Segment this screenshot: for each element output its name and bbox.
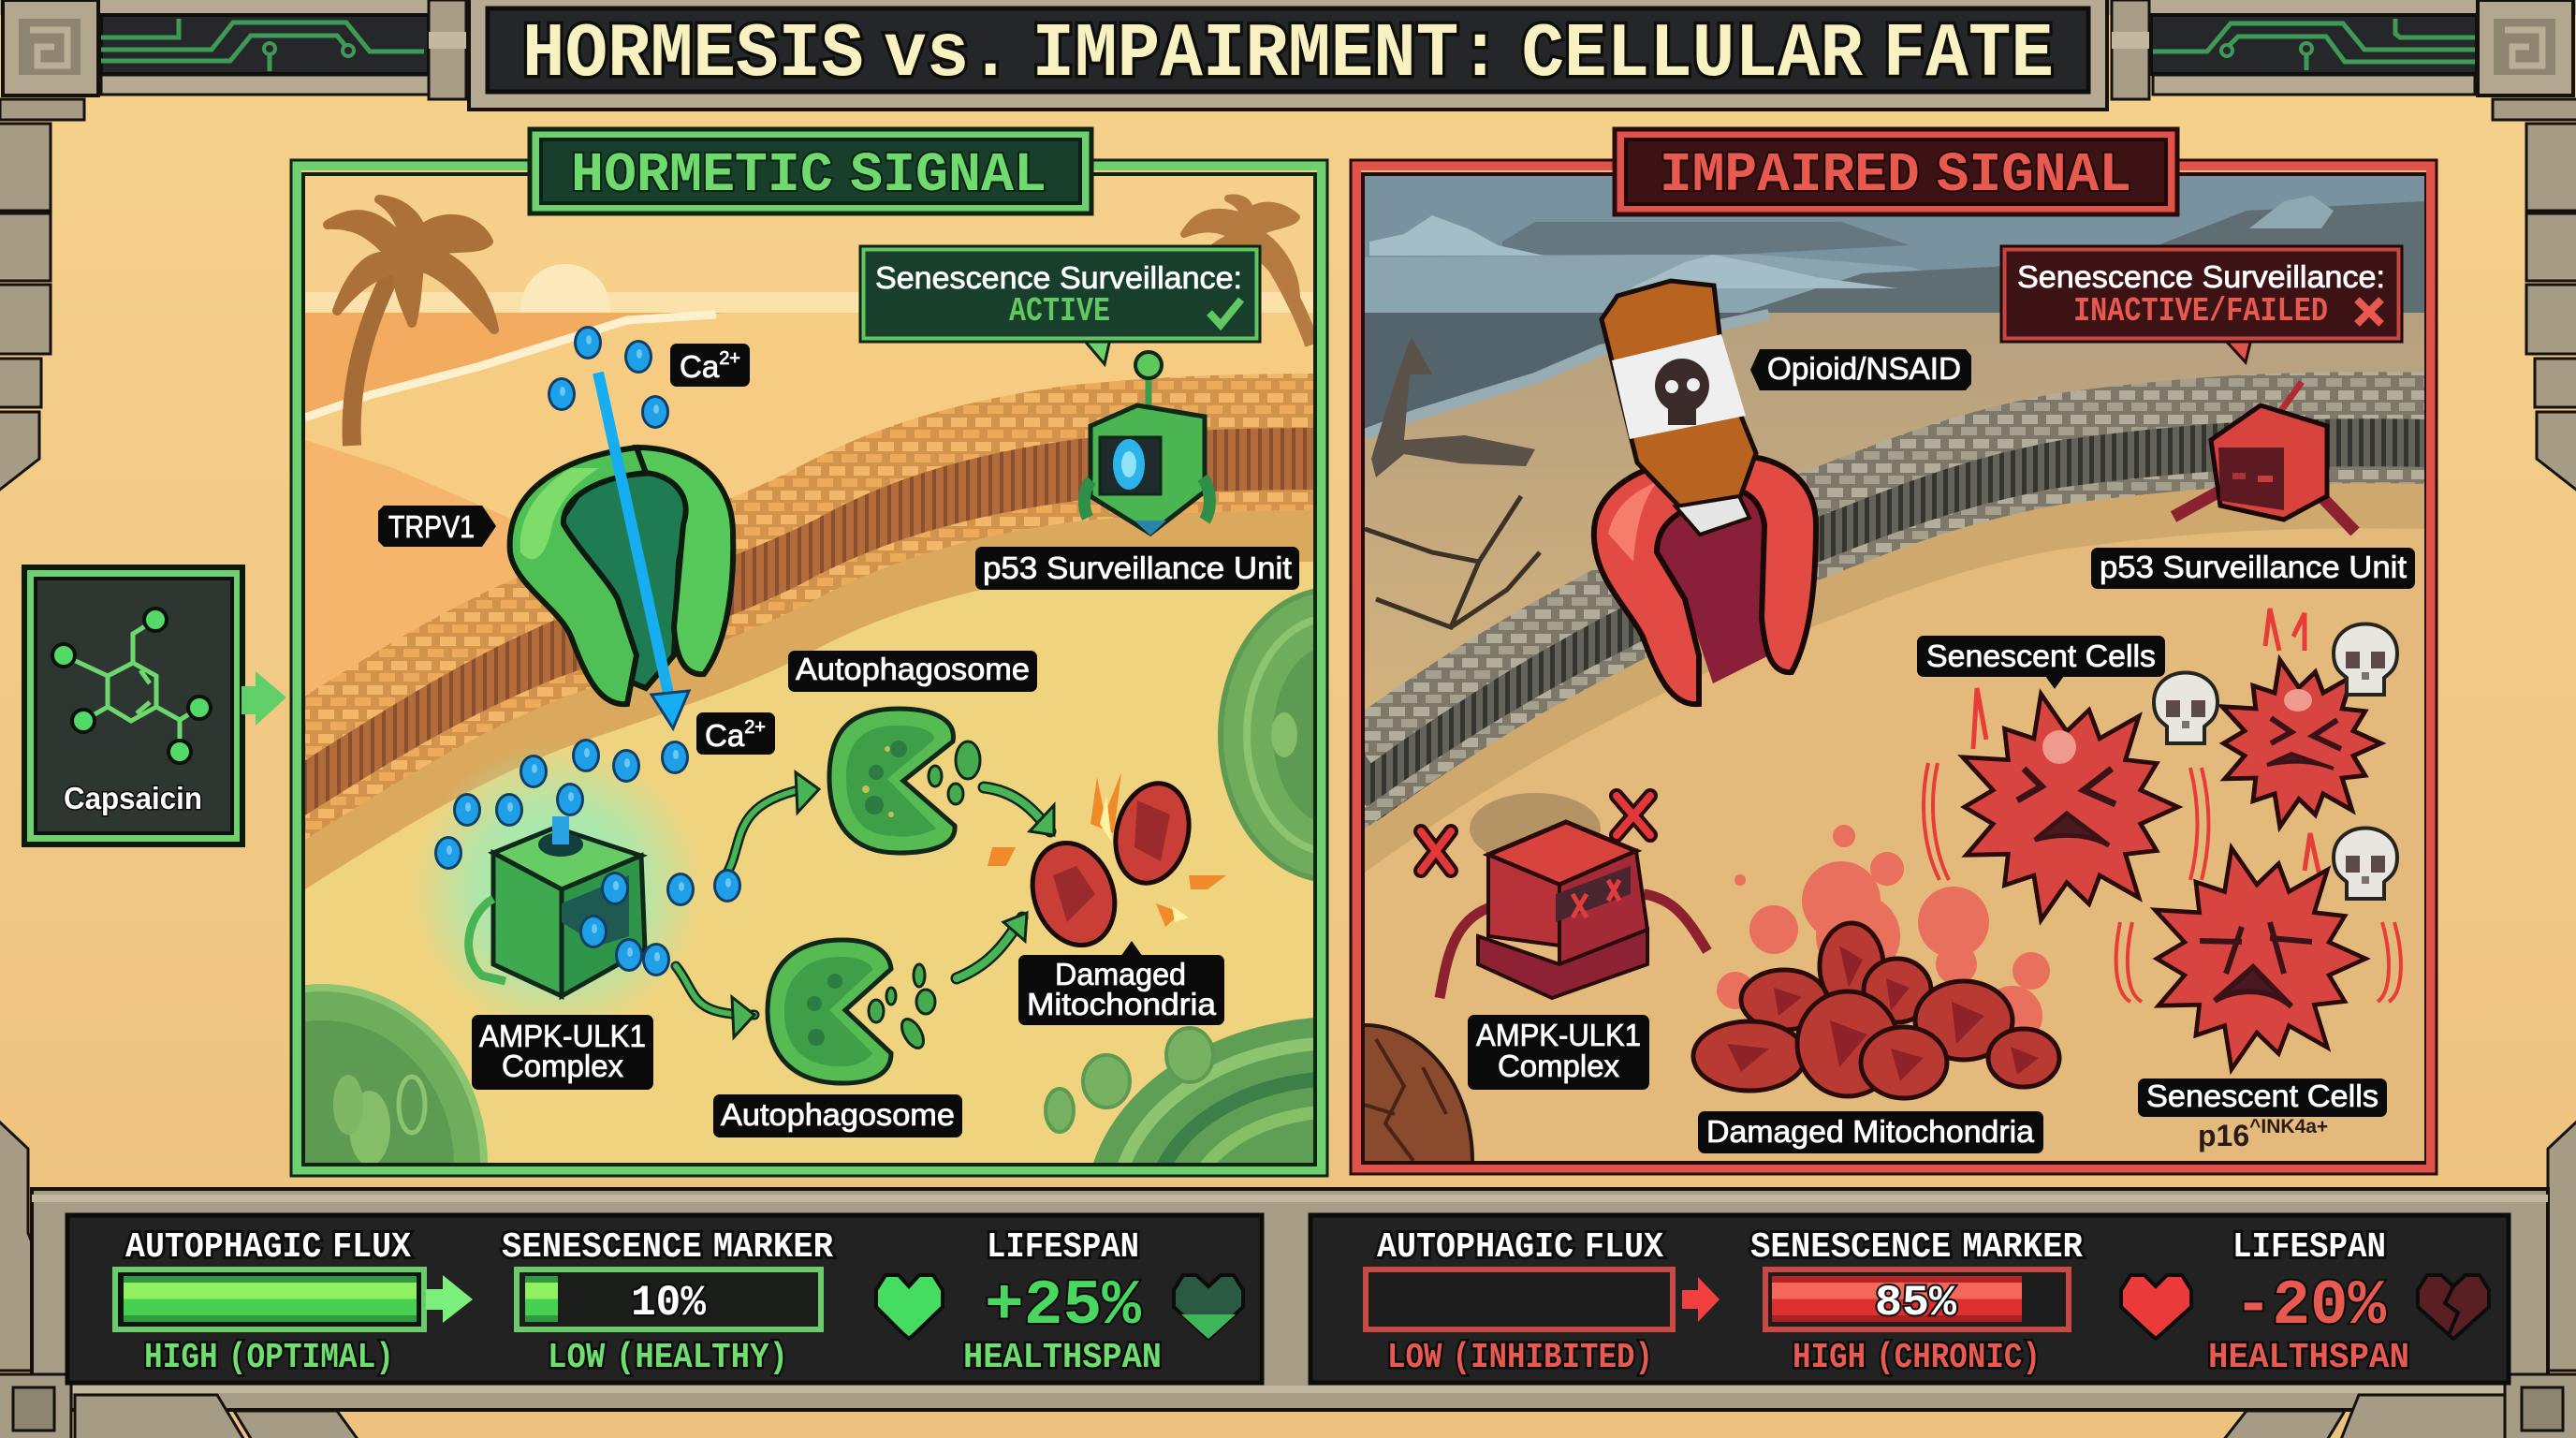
- label: damaged mitochondria right: Damaged Mitochondria: [1706, 1114, 2035, 1149]
- right wall stones: [2526, 124, 2576, 1371]
- label: p53 unit left: p53 Surveillance Unit: [983, 550, 1292, 585]
- metric: senescence marker impaired: HIGH (CHRONIC): [1793, 1338, 2041, 1378]
- metric: autophagic flux impaired: AUTOPHAGIC FLUX: [1377, 1227, 1663, 1268]
- metric: lifespan impaired: -20%: [2234, 1270, 2386, 1343]
- red AMPK cube broken: [1440, 793, 1707, 998]
- icon: skulls: [2154, 624, 2397, 899]
- metric: senescence marker impaired: 85%: [1875, 1279, 1956, 1328]
- label: AMPK-ULK1 right: [1468, 1015, 1649, 1090]
- icon: X: [2357, 300, 2381, 324]
- stats panel: hormetic: [67, 1215, 1262, 1383]
- corner block top-left: [0, 0, 98, 120]
- metric: lifespan: HEALTHSPAN: [963, 1338, 1162, 1378]
- callout: surveillance active: [860, 246, 1260, 364]
- metric: lifespan: [963, 1227, 1162, 1378]
- small vesicles: [1046, 1028, 1213, 1132]
- panel: hormetic signal: [290, 159, 1329, 1178]
- calcium ions at complex: [434, 739, 741, 976]
- icon: broken heart: [2418, 1275, 2489, 1339]
- palm tree left: [328, 199, 494, 446]
- title plate: [469, 0, 2107, 110]
- metric: autophagic flux: AUTOPHAGIC FLUX: [125, 1227, 411, 1268]
- palm tree right: [1184, 198, 1312, 345]
- label: opioid: Opioid/NSAID: [1767, 351, 1961, 386]
- sparks: [988, 772, 1226, 927]
- grey sea: [1365, 313, 1769, 433]
- metric: senescence marker: 10%: [631, 1279, 706, 1328]
- label: Ca2+ lower: 2+: [744, 717, 766, 738]
- capsaicin label: Capsaicin: [64, 781, 202, 815]
- orange dune: [305, 440, 518, 697]
- callout: surveillance active: Senescence Surveillance:: [875, 260, 1242, 295]
- TRPV1 channel blocked: [1594, 457, 1816, 704]
- stats panel: impaired: [1310, 1215, 2509, 1383]
- metric: autophagic flux impaired: [1366, 1227, 1673, 1378]
- label: p16: ^INK4a+: [2249, 1116, 2328, 1137]
- metric: senescence marker impaired: [1750, 1227, 2083, 1378]
- metric: lifespan impaired: LIFESPAN: [2232, 1227, 2386, 1268]
- metric: senescence marker impaired: SENESCENCE MARKER: [1750, 1227, 2083, 1268]
- senescent cell C: [2155, 848, 2365, 1069]
- smoke: [1717, 825, 2050, 1046]
- broken tree: [1371, 337, 1535, 477]
- callout: surveillance failed: Senescence Surveillance:: [2017, 259, 2385, 294]
- callout: surveillance active: ACTIVE: [1009, 292, 1110, 330]
- label: p16: p16: [2198, 1119, 2249, 1152]
- label: damaged mitochondria left: [1018, 941, 1224, 1025]
- damaged mitochondria pile: [1693, 923, 2059, 1098]
- corner block top-right: [2478, 0, 2576, 120]
- label: AMPK-ULK1 right: Complex: [1498, 1049, 1619, 1083]
- label: AMPK-ULK1 left: Complex: [502, 1049, 623, 1083]
- title: HORMESIS vs. IMPAIRMENT: CELLULAR FATE: [522, 11, 2054, 98]
- metric: lifespan: +25%: [985, 1270, 1141, 1343]
- AMPK-ULK1 complex cube: [419, 753, 695, 1015]
- label: AMPK-ULK1 right: AMPK-ULK1: [1476, 1018, 1641, 1052]
- storm sky: [1365, 176, 2424, 271]
- label: AMPK-ULK1 left: AMPK-ULK1: [479, 1019, 646, 1053]
- phospholipid membrane grey: [1357, 395, 2434, 824]
- organelle bottom right: [1093, 1018, 1313, 1163]
- damaged mitochondria: [988, 772, 1226, 957]
- metric: autophagic flux: [115, 1227, 424, 1378]
- label: Ca2+ upper: Ca: [680, 349, 719, 384]
- arrow: capsaicin to hormetic panel: [242, 671, 286, 726]
- banner: hormetic signal: HORMETIC SIGNAL: [571, 144, 1046, 207]
- callout: surveillance failed: INACTIVE/FAILED: [2073, 292, 2328, 330]
- senescent cell B: [2222, 660, 2381, 827]
- metric: lifespan impaired: HEALTHSPAN: [2208, 1338, 2409, 1378]
- arrow: flux red: [1682, 1277, 1720, 1322]
- circuit panel left: [101, 15, 429, 74]
- metric: senescence marker: [502, 1227, 833, 1378]
- label: damaged mitochondria left: Mitochondria: [1027, 987, 1217, 1021]
- vibration lines: [1924, 609, 2401, 1002]
- senescent cell A: [1963, 694, 2178, 920]
- footer corner stones right: [2222, 1374, 2576, 1438]
- metric: lifespan impaired: [2208, 1227, 2409, 1378]
- icon: opioid bottle: [1602, 281, 1756, 535]
- autophagosome lower: [768, 940, 935, 1083]
- metric: autophagic flux impaired: LOW (INHIBITED): [1387, 1338, 1653, 1378]
- icon: molecule: [52, 609, 211, 763]
- cell interior: [305, 510, 1313, 889]
- skull on label: [1655, 359, 1709, 425]
- header frame: [0, 0, 2576, 120]
- metric: senescence marker: LOW (HEALTHY): [548, 1338, 788, 1378]
- organelle right: [1218, 588, 1313, 882]
- banner: hormetic signal: [530, 129, 1091, 213]
- label: senescent cells top: [1917, 636, 2165, 689]
- sea and foam: [305, 313, 725, 418]
- calcium ions above membrane: [548, 326, 669, 429]
- label: Ca2+ upper: [670, 344, 750, 387]
- icon: heart green: [876, 1275, 943, 1339]
- cracks: [1365, 494, 1542, 631]
- metric: lifespan: LIFESPAN: [987, 1227, 1139, 1268]
- banner: impaired signal: [1615, 129, 2177, 214]
- label: Ca2+ upper: 2+: [719, 348, 740, 369]
- autophagosome upper: [829, 709, 980, 853]
- arrow: flux green: [426, 1275, 473, 1323]
- footer stone band: [32, 1189, 2548, 1410]
- arrows between complex and targets: [676, 772, 1054, 1037]
- icon: p53 surveillance robot active: [1084, 352, 1209, 536]
- capsaicin input box: [24, 567, 242, 844]
- icon: heart red: [2121, 1275, 2191, 1339]
- organelle bottom left: [305, 984, 488, 1163]
- phospholipid membrane: [290, 401, 1329, 837]
- label: Ca2+ lower: [696, 712, 775, 755]
- rock bottom left: [1365, 1023, 1474, 1161]
- label: autophagosome lower: Autophagosome: [721, 1097, 955, 1132]
- footer corner stones left: [0, 1374, 359, 1438]
- beach sky: [305, 176, 1313, 292]
- panel: impaired signal: [1350, 159, 2437, 1176]
- label: TRPV1: TRPV1: [388, 509, 475, 544]
- label: Ca2+ lower: Ca: [705, 718, 744, 753]
- sand ground: [1365, 313, 2424, 710]
- label: damaged mitochondria left: Damaged: [1055, 957, 1186, 991]
- banner: impaired signal: IMPAIRED SIGNAL: [1660, 144, 2131, 207]
- metric: autophagic flux: HIGH (OPTIMAL): [144, 1338, 394, 1378]
- label: autophagosome upper: Autophagosome: [796, 652, 1030, 686]
- calcium influx beam: [598, 373, 689, 728]
- TRPV1 channel: [510, 448, 733, 704]
- label: AMPK-ULK1 left: [472, 1015, 653, 1090]
- circuit panel right: [2151, 15, 2477, 74]
- cell interior: [1365, 483, 2424, 873]
- icon: check: [1209, 300, 1241, 325]
- metric: senescence marker: SENESCENCE MARKER: [502, 1227, 833, 1268]
- icon: p53 robot failed: [2174, 382, 2355, 532]
- callout: surveillance failed: [2001, 246, 2402, 362]
- label: p53 unit right: p53 Surveillance Unit: [2100, 550, 2407, 584]
- icon: heart half green: [1174, 1275, 1243, 1339]
- label: senescent cells top: Senescent Cells: [1926, 638, 2156, 673]
- left wall stones: [0, 124, 51, 1371]
- label: senescent cells bottom: Senescent Cells: [2146, 1078, 2378, 1113]
- icon: red X marks: [1421, 796, 1650, 871]
